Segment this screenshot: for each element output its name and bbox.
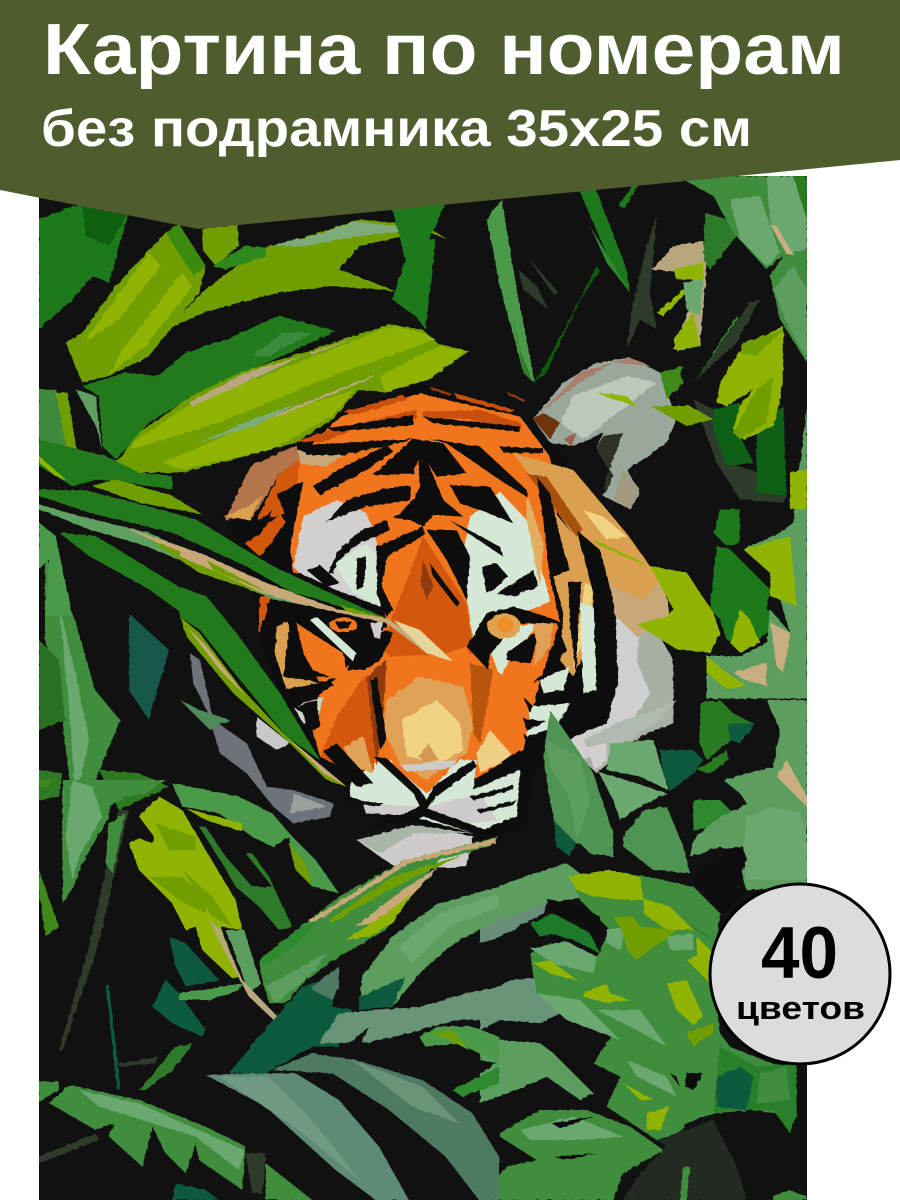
long blades over tiger's left eye bbox=[180, 520, 453, 787]
lime leaf over the shoulder and right strip bbox=[593, 406, 807, 699]
orange face bbox=[290, 393, 560, 797]
eye patches bbox=[467, 607, 567, 683]
tiger fur and neck bbox=[180, 383, 673, 870]
badge: 40 colours bbox=[710, 884, 890, 1064]
upper-left leaves bbox=[39, 196, 469, 514]
nose, mouth and whisker stripes bbox=[372, 756, 484, 834]
tan side fur bbox=[513, 453, 670, 637]
lower-left leaves bbox=[39, 780, 499, 1200]
muzzle shading bbox=[380, 537, 473, 657]
subtitle: без подрамника 35х25 см bbox=[41, 100, 752, 158]
tiger eyes bbox=[487, 613, 521, 639]
green header banner bbox=[0, 0, 900, 229]
title: Картина по номерам bbox=[43, 10, 845, 90]
top-right foliage bbox=[487, 176, 807, 653]
left vertical leaves bbox=[39, 555, 169, 810]
tiger head bbox=[180, 383, 673, 870]
long thin leaves across the face bbox=[39, 489, 372, 616]
painting: tiger in the jungle bbox=[39, 176, 807, 1200]
badge number: 40 bbox=[761, 913, 838, 994]
badge label: цветов bbox=[736, 990, 865, 1026]
lower-right leaves and bush bbox=[480, 700, 807, 1200]
tiger ear bbox=[533, 358, 713, 509]
white fur patches bbox=[293, 500, 383, 607]
black stripes bbox=[300, 438, 415, 455]
black silhouette bbox=[324, 552, 618, 763]
